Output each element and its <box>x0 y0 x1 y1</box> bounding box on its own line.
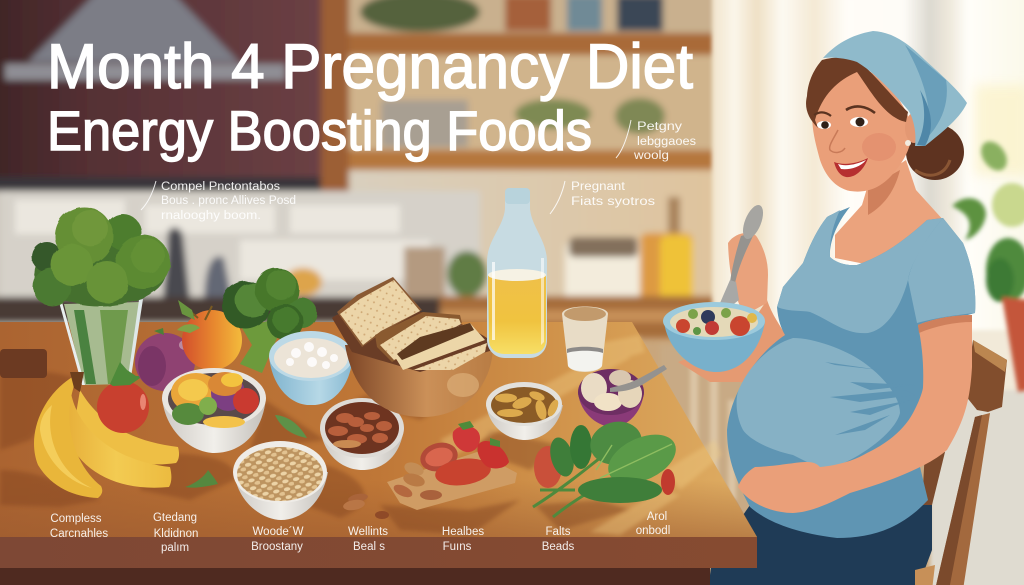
food labels: Woode´W <box>253 526 304 538</box>
callout: petgny <box>616 120 696 162</box>
spinach and tomato <box>533 416 684 517</box>
food labels <box>50 511 670 554</box>
belly <box>737 338 900 470</box>
bottle <box>487 188 547 358</box>
curtain <box>712 0 1024 340</box>
banana bunch <box>34 372 179 498</box>
sleeve <box>908 218 975 323</box>
fruit bowl <box>162 368 266 453</box>
florets <box>32 207 170 306</box>
right arm <box>738 315 972 513</box>
food labels: Kldidnon <box>154 528 198 540</box>
plum <box>135 328 195 391</box>
nuts small bowl <box>486 382 563 440</box>
neck <box>835 160 945 270</box>
title <box>47 32 693 162</box>
food labels: Beads <box>542 541 575 553</box>
food labels: palım <box>161 542 189 554</box>
shirt folds <box>825 362 915 435</box>
callout: petgny: lebgɡaoes <box>637 136 696 148</box>
face <box>806 57 923 192</box>
table front edge <box>0 537 757 568</box>
hair <box>806 57 908 128</box>
figs <box>417 439 493 489</box>
title: Month 4 Pregnancy Diet <box>47 32 693 102</box>
food labels: Broostany <box>251 541 303 553</box>
callout: compel: Bous . pronc Allives Posd <box>161 195 296 207</box>
nose <box>830 130 845 152</box>
eyes <box>814 106 875 129</box>
yogurt bowl <box>269 331 353 405</box>
jeans <box>708 500 932 585</box>
purple apple bowl <box>578 365 667 427</box>
food labels: Gtedang <box>153 512 197 524</box>
second broccoli <box>222 268 317 373</box>
callout: pregnant <box>550 181 655 214</box>
food labels: Compless <box>50 513 102 525</box>
title: Energy Boosting Foods <box>47 99 592 162</box>
background plant <box>952 137 1024 392</box>
callout: petgny: Petgny <box>637 121 682 133</box>
food labels: Beal s <box>353 541 385 553</box>
food labels: onbodl <box>636 525 670 537</box>
headscarf <box>823 31 967 146</box>
table <box>0 322 757 585</box>
strawberries <box>453 421 509 468</box>
hair bun <box>906 124 964 180</box>
callout: petgny: woolg <box>633 150 669 162</box>
bread in bowl <box>332 277 493 417</box>
broccoli in glass <box>32 207 170 385</box>
food labels: Healbes <box>442 526 484 538</box>
woman <box>663 31 975 538</box>
vase stems <box>59 255 143 385</box>
shirt light chest <box>777 210 943 333</box>
orange apple <box>177 300 242 370</box>
callout: compel <box>141 181 296 222</box>
oats bowl <box>233 441 328 520</box>
chair <box>915 340 1007 585</box>
counter and cabinet <box>930 385 1024 585</box>
ear <box>905 113 923 143</box>
bowl held <box>663 302 765 372</box>
herb sprig <box>185 470 218 488</box>
food labels: Carcnahles <box>50 528 108 540</box>
hand and fork <box>720 202 768 315</box>
food labels: Arol <box>647 511 667 523</box>
food labels: Wellints <box>348 526 388 538</box>
food labels: Falts <box>546 526 571 538</box>
callout: compel: Compel Pnctontabos <box>161 181 280 193</box>
almonds on board <box>392 460 442 500</box>
red tomato <box>97 362 149 433</box>
almonds on table <box>342 492 389 519</box>
small leaf <box>275 415 307 438</box>
window light <box>975 85 1024 175</box>
forearm to bowl <box>678 300 786 382</box>
callout: pregnant: Pregnant <box>571 181 626 193</box>
callout: compel: rnalooghy boom. <box>161 210 261 222</box>
mouth <box>834 158 868 177</box>
shirt torso <box>727 207 975 538</box>
cutting board with fruit <box>387 421 517 510</box>
water glass <box>562 306 608 372</box>
nuts bowl <box>320 398 404 470</box>
food labels: Fuıns <box>443 541 472 553</box>
callout: pregnant: Fiats syotros <box>571 196 655 208</box>
wallet <box>0 349 47 378</box>
